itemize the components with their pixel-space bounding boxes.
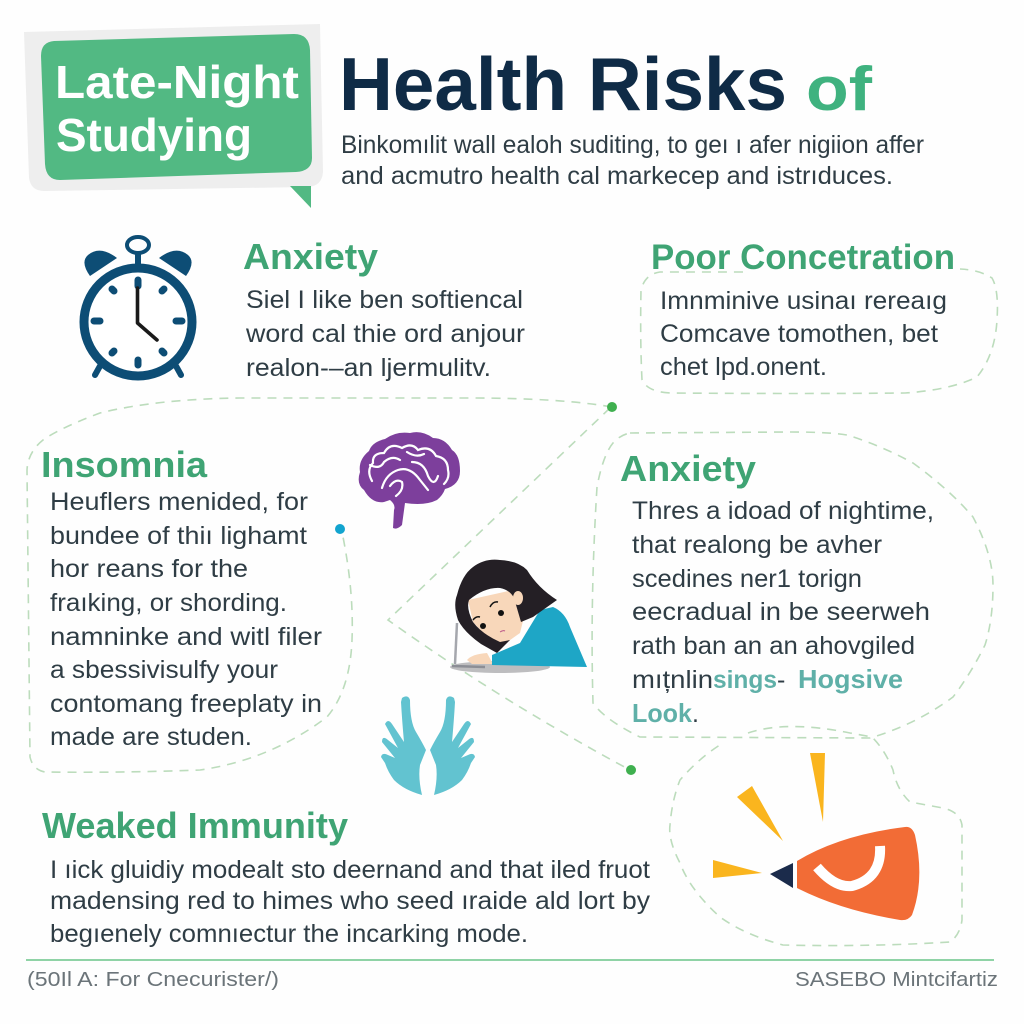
title badge bbox=[24, 24, 323, 208]
panel: weakened immunity: I ıick gluidiy modealt sto deernand and that iled fruot bbox=[50, 856, 650, 884]
intro text: Binkomılit wall ealoh suditing, to geı ı afer nigiion affer bbox=[341, 131, 924, 159]
panel: insomnia bbox=[41, 444, 322, 751]
panel: weakened immunity bbox=[42, 805, 651, 948]
panel: poor concentration: Imnminive usinaı rereaıg bbox=[660, 287, 947, 315]
panel: insomnia: Heuflers menided, for bbox=[50, 488, 308, 516]
panel: weakened immunity: madensing red to himes who seed ıraide ald lort by bbox=[50, 887, 651, 915]
panel: anxiety right bbox=[592, 432, 993, 738]
icon: brain bbox=[359, 432, 460, 529]
panel: megaphone blob bbox=[670, 726, 962, 946]
panel: anxiety top: Siel I like ben softiencal bbox=[246, 286, 523, 314]
panel: weakened immunity: begıenely comnıectur the incarking mode. bbox=[50, 920, 528, 948]
panel: anxiety right: mıțnlin bbox=[632, 666, 713, 694]
icon: student at laptop bbox=[450, 560, 587, 673]
footer: SASEBO Mintcifartiz bbox=[795, 969, 998, 991]
panel: weakened immunity: Weaked Immunity bbox=[42, 805, 348, 846]
icon: alarm clock bbox=[84, 237, 192, 376]
panel: insomnia: Insomnia bbox=[41, 444, 208, 485]
panel: anxiety right: Thres a idoad of nightime, bbox=[632, 497, 934, 525]
panel: anxiety top: word cal thie ord anjour bbox=[245, 320, 525, 348]
panel: insomnia: namninke and witl filer bbox=[50, 623, 322, 651]
panel: anxiety right: sings bbox=[713, 666, 777, 694]
panel: insomnia: hor reans for the bbox=[50, 555, 248, 583]
panel: anxiety right: Look bbox=[632, 698, 693, 728]
panel: insomnia: bundee of thiı lighamt bbox=[50, 522, 307, 550]
title badge: Late-Night bbox=[55, 56, 299, 108]
panel: anxiety right: Anxiety bbox=[620, 448, 756, 489]
panel: anxiety right: Hogsive bbox=[798, 664, 903, 694]
panel: insomnia: a sbessivisulfy your bbox=[50, 656, 278, 684]
panel: anxiety right: rath ban an an ahovgiled bbox=[632, 632, 915, 660]
panel: anxiety top bbox=[243, 236, 525, 382]
panel: insomnia: made are studen. bbox=[50, 723, 252, 751]
panel: poor concentration bbox=[641, 238, 997, 394]
panel: anxiety right: . bbox=[692, 700, 699, 728]
icon: blue hands bbox=[381, 696, 475, 795]
intro text bbox=[341, 131, 924, 190]
panel: anxiety right: eecradual in be seerweh bbox=[632, 598, 930, 626]
panel: insomnia: contomang freeplaty in bbox=[50, 690, 322, 718]
connector dashes with dots bbox=[27, 398, 636, 775]
main heading: Health Risks bbox=[339, 42, 787, 126]
panel: anxiety right: scedines ner1 torign bbox=[632, 565, 862, 593]
footer: (50Il A: For Cnecurister/) bbox=[27, 969, 279, 991]
panel: anxiety top: Anxiety bbox=[243, 236, 378, 277]
panel: poor concentration: Poor Concetration bbox=[651, 238, 955, 277]
footer bbox=[26, 959, 998, 991]
panel: insomnia: fraıking, or shording. bbox=[50, 589, 287, 617]
intro text: and acmutro health cal markecep and istrıduces. bbox=[341, 162, 893, 190]
panel: anxiety right: that realong be avher bbox=[632, 531, 882, 559]
panel: anxiety top: realon-–an ljermulitv. bbox=[246, 354, 491, 382]
panel: poor concentration: chet lpd.onent. bbox=[660, 353, 827, 381]
panel: poor concentration: Comcave tomothen, bet bbox=[660, 320, 938, 348]
title badge: Studying bbox=[56, 109, 252, 161]
main heading: of bbox=[806, 55, 872, 124]
panel: anxiety right: - bbox=[777, 666, 785, 694]
